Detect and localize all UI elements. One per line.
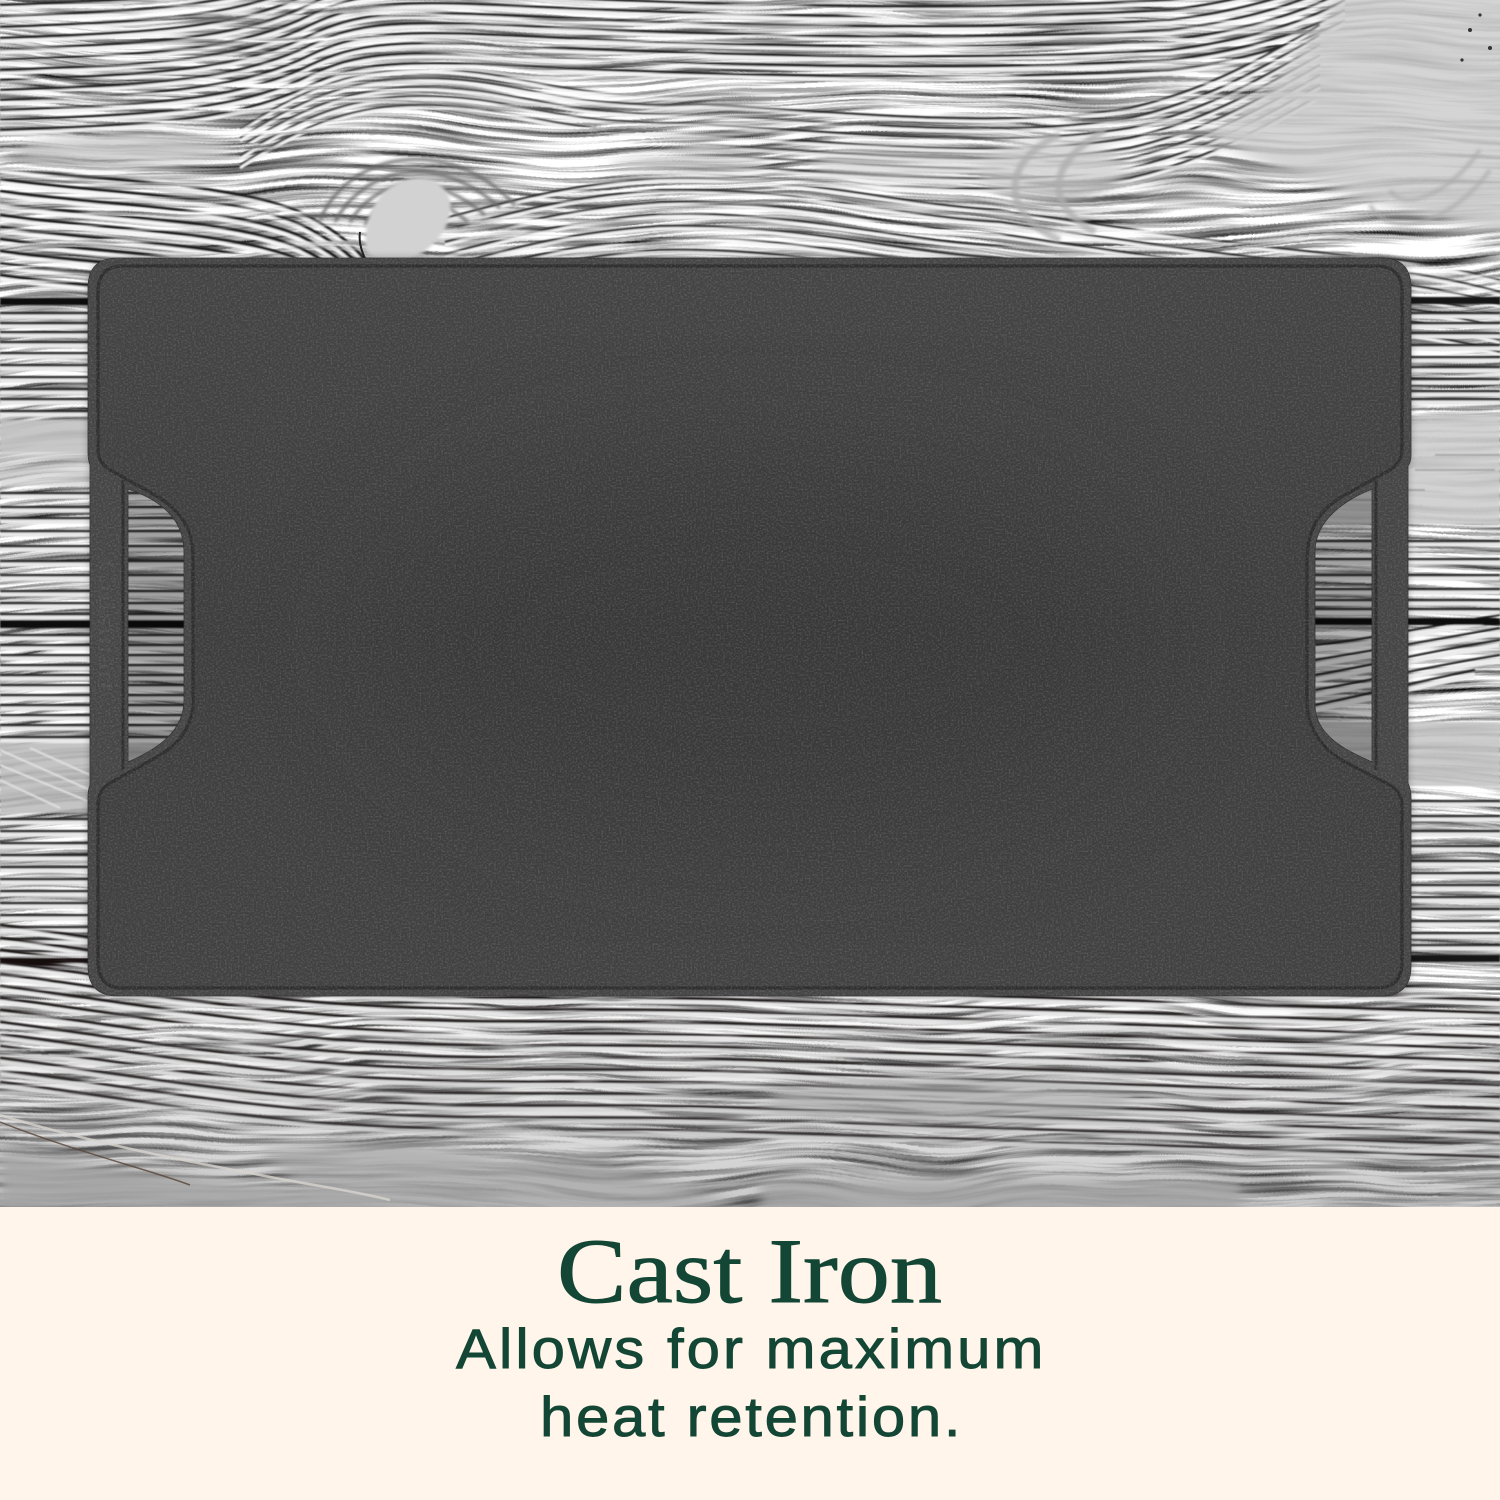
cast iron griddle (88, 258, 1411, 996)
griddle shadow (88, 258, 1411, 996)
dark pits at top right (1460, 13, 1492, 62)
wood knot left (320, 159, 515, 268)
griddle speckle overlay (88, 258, 1411, 996)
griddle surface dark centre (380, 450, 1140, 830)
caption title: Cast Iron (557, 1220, 942, 1322)
grain lines: top plank (0, 0, 1500, 372)
griddle body with handle openings (88, 258, 1411, 996)
wood tone patches (20, 0, 1500, 240)
handle grooves (123, 480, 1376, 770)
caption panel (0, 1207, 1500, 1500)
caption body: Allows for maximum (456, 1319, 1043, 1381)
grain lines: bottom plank (0, 925, 1500, 1161)
wood rings right (1015, 130, 1490, 240)
caption body (456, 1319, 1043, 1449)
embossed handle logo: Cuisinart (93, 560, 119, 692)
griddle raised cooking surface (98, 266, 1402, 988)
grain lines: centre planks, left margin (0, 297, 184, 967)
caption body: heat retention. (540, 1387, 961, 1449)
bottom plank shading and worn patches (0, 1000, 1500, 1215)
grain lines: centre planks, right margin (1305, 297, 1500, 962)
